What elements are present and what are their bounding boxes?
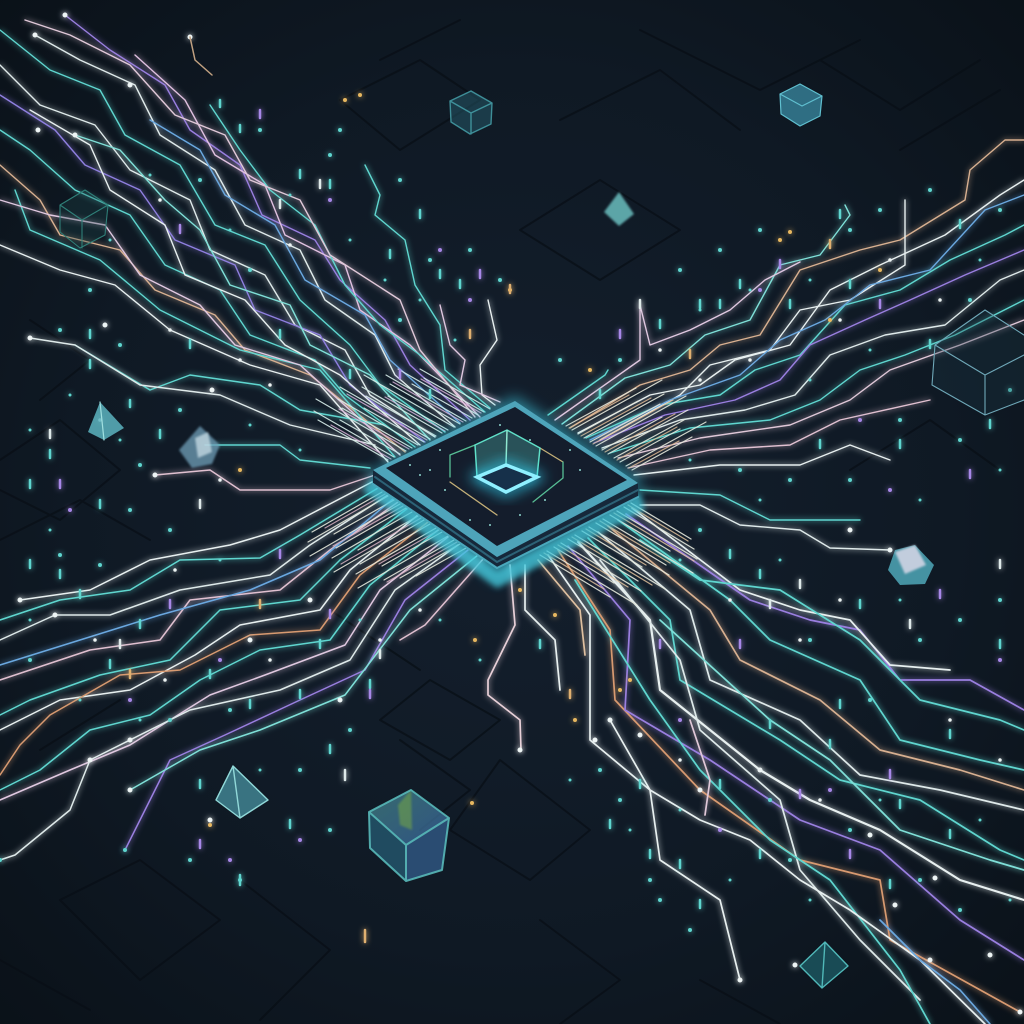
icon: crystal cluster right	[888, 545, 934, 585]
trace fan: north-east of chip	[566, 380, 706, 470]
trace fan: south-west of chip	[308, 492, 466, 588]
chip specks	[410, 425, 580, 525]
icon: diamond bottom right	[800, 942, 848, 988]
trace bundle: south-west	[0, 482, 484, 860]
icon: crystal left	[179, 426, 220, 468]
trace fan: south-west tint	[325, 494, 457, 582]
trace fan: north-east tint	[569, 395, 679, 468]
trace bundle: north-east	[548, 140, 1024, 550]
trace fan: south-east tint	[544, 505, 694, 589]
chip hexagon outline	[450, 445, 563, 515]
chip top rim	[373, 401, 638, 557]
chip fuzzy rim	[362, 478, 645, 588]
icon: pyramid bottom left	[216, 766, 268, 818]
trace fan: north-west of chip	[314, 369, 490, 460]
trace fan: north-west tint	[331, 379, 481, 459]
chip glow	[365, 396, 645, 582]
short trace: top left fragment	[190, 37, 212, 75]
chip top face	[386, 407, 627, 546]
chip body	[373, 470, 638, 568]
icon: cube top right	[780, 84, 822, 126]
icon: glass cube bottom	[369, 790, 449, 881]
chip central cube	[475, 430, 540, 492]
icon: large wire cube right	[932, 310, 1024, 415]
icon: crystal top	[604, 192, 634, 226]
trace fan: south-east of chip	[540, 503, 697, 605]
icon: cube top centre	[450, 91, 492, 134]
icon: faint wire cube left	[60, 190, 108, 248]
trace bundle: north-west	[0, 15, 500, 490]
chip	[362, 396, 645, 588]
icon: pyramid left	[88, 402, 124, 440]
trace bundle: south-east	[488, 508, 1024, 1024]
